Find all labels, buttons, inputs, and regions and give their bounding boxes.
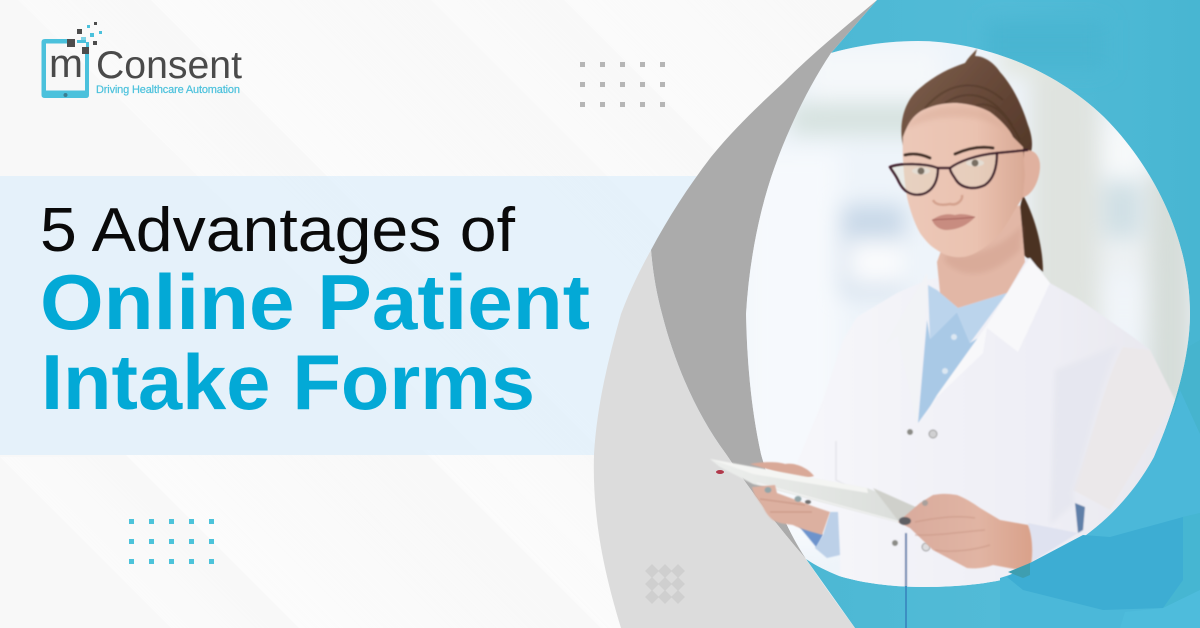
face [903,103,1025,257]
logo tagline: Driving Healthcare Automation [96,84,240,96]
coat sleeve shading [836,442,1088,534]
logo pixel squares [67,22,102,54]
light grey crescent [594,250,855,628]
glasses [890,150,1028,195]
red nail [716,470,724,474]
hair strands [925,84,1012,125]
coat collar right [931,258,1049,404]
coat collar left [885,273,928,425]
shirt cuff left [798,520,823,548]
photo: woman in lab coat [712,41,1190,587]
coat cuff left [815,512,840,558]
neck [937,205,1025,308]
logo: mConsent: Consent [96,44,242,87]
title line 2: Online Patient [40,258,590,346]
teal backdrop [806,0,1200,628]
logo wordmark: m [49,42,83,86]
teal overlay: coat under tint [1000,390,1200,628]
ponytail [1016,195,1043,272]
title heading [40,196,590,426]
blue placket through overlay [905,586,907,628]
right hand [898,494,1032,572]
lips [932,214,975,230]
diamond pattern [645,564,685,604]
dot grid: grey [580,62,665,107]
logo tablet frame [42,39,89,98]
title line 1: 5 Advantages of [40,196,516,265]
nose [933,195,962,205]
title band [0,176,720,455]
title line 3: Intake Forms [41,338,535,426]
teal sleeve overlay [1007,517,1183,610]
ear [1021,150,1040,198]
eyes [912,168,930,174]
tablet [710,459,927,523]
photo blurred background [740,35,1200,595]
forehead shadow [910,106,990,124]
dark grey crescent [651,0,877,559]
placket [905,533,907,593]
dot grid: teal [129,519,214,564]
fingers behind tablet [750,462,814,480]
lab coat [840,256,1175,587]
left hand [752,485,830,535]
hair [901,49,1032,200]
right cuff [1028,523,1078,562]
shirt [918,285,1007,423]
eyebrows [905,147,993,158]
logo: mConsent [42,22,242,98]
coat buttons [907,429,913,435]
woman body clipped to photo [835,48,1175,587]
